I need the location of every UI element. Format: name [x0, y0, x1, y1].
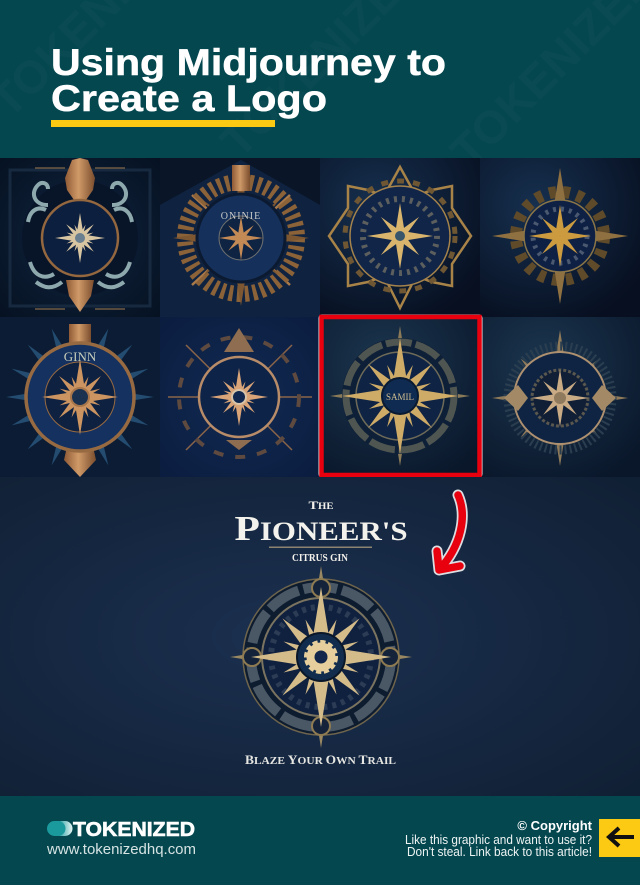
tagline: BLAZE YOUR OWN TRAIL [245, 752, 396, 767]
icon: logo mark [47, 821, 72, 836]
final logo panel [0, 477, 640, 796]
tile 2: bottle emblem with copper ornament [160, 158, 320, 317]
compass logo [215, 551, 427, 763]
label heading: The Pioneer's Citrus Gin [234, 498, 408, 564]
label heading: The Pioneer's Citrus Gin: THE [308, 498, 334, 512]
tile 4: gold compass [480, 158, 640, 317]
title: Create a Logo [51, 77, 327, 119]
brand logo: www.tokenizedhq.com [46, 841, 196, 858]
tile 8: tan compass with side ornaments [480, 317, 640, 477]
tile 3: gold compass with petals [320, 158, 480, 317]
tile 5: bronze emblem with blue spikes: GINN [64, 349, 97, 364]
title [51, 41, 446, 119]
arrow pointing to final logo [437, 495, 462, 570]
copyright note [405, 818, 593, 859]
icon: yellow arrow box [599, 819, 640, 857]
title: Using Midjourney to [51, 41, 446, 83]
header panel [0, 0, 640, 177]
tile 7: selected compass: SAMIL [386, 392, 414, 402]
logo grid [0, 158, 640, 502]
tile 1: bottle emblem with silver scrolls [0, 158, 160, 317]
tile 6: copper line-art emblem [160, 317, 320, 477]
selection highlight [319, 315, 482, 477]
brand logo [46, 819, 196, 858]
copyright note: Like this graphic and want to use it? [405, 833, 592, 847]
brand logo: TOKENIZED [73, 819, 195, 841]
tile 2: bottle emblem with copper ornament: ONINIE [221, 211, 261, 222]
tile 7: selected compass [319, 315, 481, 477]
label heading: The Pioneer's Citrus Gin: CITRUS GIN [292, 553, 349, 564]
footer panel [0, 796, 640, 885]
title underline [51, 120, 275, 127]
copyright note: Don't steal. Link back to this article! [407, 845, 592, 859]
label heading: The Pioneer's Citrus Gin: PIONEER'S [234, 509, 408, 548]
copyright note: © Copyright [517, 818, 593, 833]
tile 5: bronze emblem with blue spikes [0, 292, 185, 502]
